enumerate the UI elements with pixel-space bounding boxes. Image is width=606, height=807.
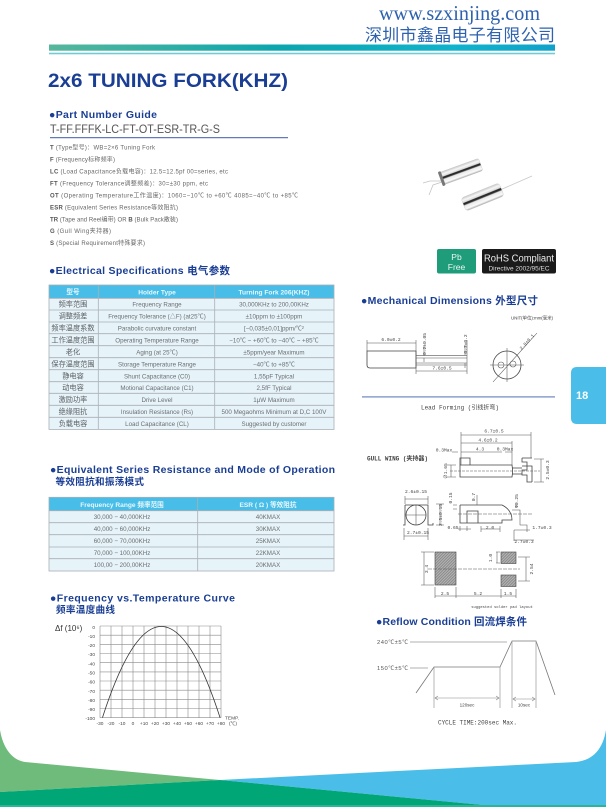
- table: electrical specifications: Operating Temperature Range: [115, 337, 199, 344]
- table: electrical specifications: 1,55pF Typical: [254, 373, 294, 380]
- table: ESR: 60,000 − 70,000KHz: [94, 538, 150, 545]
- table: ESR: 20KMAX: [256, 562, 280, 569]
- table: electrical specifications: Drive Level: [142, 397, 172, 404]
- y axis ticks: -60: [88, 680, 95, 686]
- unit note: UNIT(单位):mm(毫米): [511, 314, 554, 322]
- line chart: frequency vs temperature: [55, 624, 239, 727]
- panel: electrical specifications: [49, 264, 334, 429]
- drawing: gull wing top view: 2.5±0.3: [545, 460, 551, 480]
- drawing: gull wing front view: 2.7±0.15: [407, 530, 429, 536]
- chart grid: [100, 626, 221, 718]
- heading: frequency vs temperature: 频率温度曲线: [56, 604, 115, 616]
- table: electrical specifications: Frequency Tolerance (△F) (at25℃): [108, 312, 206, 320]
- table: electrical specifications: 保存温度范围: [51, 359, 95, 368]
- chart: reflow profile: 10sec: [518, 702, 531, 708]
- panel: reflow condition: [376, 615, 555, 726]
- caption: cycle time: CYCLE TIME:200sec Max.: [438, 720, 517, 726]
- table: electrical specifications: Motional Capacitance (C1): [120, 385, 194, 392]
- guide text lines: G (Gull Wing夹持器): [50, 227, 111, 235]
- title: 2x6 TUNING FORK(KHZ): [48, 71, 288, 92]
- table: electrical specifications: Parabolic curvature constant: [118, 325, 196, 332]
- drawing: gull wing side view: [447, 492, 552, 545]
- table: electrical specifications: −40℃ to +85℃: [253, 361, 295, 368]
- y axis ticks: -40: [88, 662, 95, 668]
- guide text lines: T (Type型号)：WB=2×6 Tuning Fork: [50, 144, 156, 152]
- badge: RoHS compliant: Directive 2002/95/EC: [488, 266, 550, 272]
- x axis ticks: +30: [162, 721, 170, 727]
- table: electrical specifications: 激励功率: [59, 395, 87, 404]
- chart: reflow profile: [377, 639, 555, 708]
- x axis ticks: -10: [119, 721, 126, 727]
- drawing: gull wing top view: 4.3: [476, 446, 484, 452]
- y axis ticks: [85, 625, 95, 722]
- drawing: gull wing front view: 2.5±0.15: [438, 504, 444, 526]
- drawing: end view: 2.0±0.1: [519, 333, 536, 352]
- page tab: 18: [571, 367, 606, 424]
- table: ESR: 40KMAX: [256, 514, 280, 521]
- table: ESR: 40,000 − 60,000KHz: [94, 526, 150, 533]
- table: electrical specifications: −10℃ ~ +60℃ to −40℃ ~ +85℃: [229, 337, 319, 344]
- y axis ticks: -20: [88, 643, 95, 649]
- x axis ticks: +50: [184, 721, 192, 727]
- drawing: side view: [367, 333, 469, 374]
- table: electrical specifications: 型号: [66, 287, 80, 296]
- table: electrical specifications: 绝缘阻抗: [59, 407, 87, 416]
- panel: equivalent series resistance: [49, 464, 335, 571]
- x axis ticks: +70: [206, 721, 214, 727]
- table: ESR: Frequency Range 频率范围: [80, 500, 164, 509]
- heading: reflow condition: ●Reflow Condition 回流焊条件: [376, 615, 528, 628]
- heading: electrical specifications: ●Electrical Specifications 电气参数: [49, 264, 230, 277]
- x axis ticks: +20: [151, 721, 159, 727]
- x axis ticks: +10: [140, 721, 148, 727]
- heading: equivalent series resistance: 等效阻抗和振荡模式: [56, 476, 144, 488]
- drawing: gull wing side view: 0.7: [471, 493, 477, 501]
- page tab: 18: 18: [576, 390, 588, 402]
- table: electrical specifications: ±10ppm to ±100ppm: [246, 314, 302, 320]
- guide underline: [50, 137, 288, 138]
- guide text lines: [50, 144, 298, 247]
- drawing: gull wing front view: 2.6±0.15: [405, 489, 427, 495]
- drawing: gull wing front view: [403, 489, 444, 540]
- table: electrical specifications: Storage Temperature Range: [118, 361, 197, 368]
- drawing: solder pad layout: 2.5: [441, 591, 449, 597]
- y axis ticks: 0: [92, 625, 95, 631]
- drawing: side view: 0.2±0.05: [422, 333, 428, 355]
- drawing: gull wing side view: 2.0: [486, 525, 494, 531]
- x axis ticks: +80: [217, 721, 225, 727]
- badge: Pb free: Pb: [451, 252, 462, 262]
- guide text lines: ESR (Equivalent Series Resistance等效阻抗): [50, 204, 178, 212]
- drawing: gull wing side view: Φ0.25: [514, 494, 520, 508]
- heading: equivalent series resistance: [50, 464, 335, 488]
- table: ESR: 30,000 − 40,000KHz: [94, 514, 150, 521]
- caption: lead forming: Lead Forming (引线折弯): [421, 404, 499, 412]
- table: electrical specifications: 1μW Maximum: [253, 397, 295, 404]
- drawing: gull wing top view: 0.3Max: [497, 446, 514, 452]
- y axis label: Δf (10⁶): [55, 624, 83, 633]
- badge: RoHS compliant: [482, 249, 556, 274]
- drawing: solder pad layout: 3.4: [424, 565, 430, 573]
- chart: reflow profile: 150℃±5℃: [377, 665, 408, 672]
- table: electrical specifications: 老化: [66, 347, 80, 356]
- heading: frequency vs temperature: [50, 592, 235, 616]
- bottom wave background: [0, 730, 606, 807]
- badge: Pb free: [437, 249, 476, 274]
- table: electrical specifications: 负载电容: [59, 419, 87, 428]
- table: electrical specifications: Shunt Capacitance (C0): [124, 373, 190, 380]
- drawing: solder pad layout: suggested solder pad layout: [471, 605, 533, 610]
- table: electrical specifications: Suggested by customer: [241, 421, 307, 428]
- table: electrical specifications: Load Capacitance (CL): [125, 421, 189, 428]
- table: electrical specifications: 500 Megaohms Minimum at D,C 100V: [222, 409, 327, 416]
- y axis ticks: -80: [88, 698, 95, 704]
- drawing: gull wing top view: 4.6±0.2: [478, 438, 498, 444]
- guide text lines: FT (Frequency Tolerance调整频差)：30=±30 ppm, etc: [50, 180, 208, 188]
- drawing: gull wing top view: 6.7±0.5: [484, 428, 504, 434]
- guide text lines: LC (Load Capacitance负载电容)：12.5=12.5pf 00=series, etc: [50, 168, 228, 176]
- panel: frequency vs temperature curve: [50, 592, 239, 727]
- y axis ticks: -90: [88, 707, 95, 713]
- table: ESR: ESR ( Ω ) 等效阻抗: [240, 500, 297, 509]
- table: electrical specifications: 2,5fF Typical: [257, 385, 291, 392]
- drawing: gull wing side view: 0.65: [447, 525, 459, 531]
- drawing: solder pad layout: [421, 552, 535, 610]
- y axis ticks: -10: [88, 634, 95, 640]
- drawing: gull wing side view: 1.7±0.3: [532, 525, 552, 531]
- temperature curve: [102, 626, 220, 718]
- heading: mechanical dimensions: ●Mechanical Dimensions 外型尺寸: [361, 294, 538, 307]
- divider: [362, 396, 555, 398]
- drawing: gull wing top view: ∅1.65: [443, 463, 449, 479]
- drawing: side view: 0.7±0.2: [463, 334, 469, 354]
- table: electrical specifications: 频率范围: [59, 300, 87, 308]
- y axis ticks: -30: [88, 652, 95, 658]
- crystal with straight leads: [461, 176, 532, 211]
- heading: frequency vs temperature: ●Frequency vs.Temperature Curve: [50, 592, 235, 604]
- table: electrical specifications: ±5ppm/year Maximum: [243, 349, 305, 356]
- guide text lines: OT (Operating Temperature工作温度)：1060=−10℃ to +60℃ 4085=−40℃ to +85℃: [50, 192, 298, 200]
- x axis ticks: -30: [97, 721, 104, 727]
- table: electrical specifications: Holder Type: [138, 290, 176, 296]
- badge: RoHS compliant: RoHS Compliant: [484, 254, 554, 264]
- table: ESR: 30KMAX: [256, 526, 280, 533]
- x axis ticks: 0: [132, 721, 135, 727]
- table: ESR: 25KMAX: [256, 538, 280, 545]
- table: electrical specifications: 工作温度范围: [51, 335, 95, 344]
- table: electrical specifications: Aging (at 25℃): [136, 349, 178, 356]
- drawing: solder pad layout: 1.0: [488, 554, 494, 562]
- table: ESR: 70,000 − 100,00KHz: [94, 550, 150, 557]
- chart: reflow profile: 120sec: [460, 702, 475, 708]
- drawing: solder pad layout: 5.2: [474, 591, 482, 597]
- drawing: solder pad layout: 2.54: [529, 563, 535, 575]
- table: electrical specifications: 静电容: [62, 371, 84, 380]
- company name: 深圳市鑫晶电子有限公司: [365, 26, 555, 45]
- header bar: [49, 44, 555, 54]
- table: electrical specifications: Insulation Resistance (Rs): [121, 409, 193, 416]
- table: electrical specifications: 动电容: [62, 383, 84, 392]
- x axis ticks: [97, 721, 225, 727]
- table: electrical specifications: [−0,035±0,01]ppm/℃²: [244, 325, 304, 332]
- chart: reflow profile: 240℃±5℃: [377, 639, 408, 646]
- table: electrical specifications: 频率温度系数: [51, 323, 95, 332]
- table: ESR: 22KMAX: [256, 550, 280, 557]
- drawing: gull wing top view: 0.3Max: [436, 448, 453, 454]
- panel: gull wing drawings: [367, 428, 552, 610]
- drawing: gull wing side view: 0.15: [448, 492, 454, 504]
- product photo: crystals: [423, 157, 532, 211]
- guide text lines: F (Frequency标称频率): [50, 156, 115, 164]
- y axis ticks: -100: [85, 716, 95, 722]
- guide text lines: S (Special Requirement特殊要求): [50, 239, 145, 247]
- table: electrical specifications: Frequency Range: [132, 302, 182, 308]
- guide text lines: TR (Tape and Reel编带) OR B (Bulk Pack散装): [50, 216, 178, 224]
- table: electrical specifications: [49, 285, 334, 429]
- table: electrical specifications: 30,000KHz to 200,00KHz: [239, 302, 309, 308]
- panel: part number guide: [49, 109, 298, 247]
- x axis ticks: +60: [195, 721, 203, 727]
- x axis label: [225, 716, 239, 727]
- drawing: solder pad layout: 1.5: [504, 591, 512, 597]
- x axis label: (℃): [229, 721, 237, 727]
- x axis label: TEMP.: [225, 716, 239, 722]
- y axis ticks: -70: [88, 689, 95, 695]
- badge: Pb free: Free: [448, 262, 466, 272]
- part number pattern: T-FF.FFFK-LC-FT-OT-ESR-TR-G-S: [50, 124, 220, 136]
- drawing: side view: 7.6±0.5: [432, 366, 452, 372]
- drawing: gull wing top view: [436, 428, 551, 482]
- x axis ticks: +40: [173, 721, 181, 727]
- table: electrical specifications: Turning Fork 206(KHZ): [239, 290, 309, 296]
- company website: www.szxinjing.com: [379, 1, 540, 25]
- drawing: side view: 6.0±0.2: [381, 337, 401, 343]
- heading: equivalent series resistance: ●Equivalent Series Resistance and Mode of Operation: [50, 464, 335, 476]
- table: electrical specifications: 调整频差: [59, 312, 87, 320]
- y axis ticks: -50: [88, 670, 95, 676]
- panel: mechanical dimensions: [361, 294, 555, 412]
- crystal with forked leads: [423, 157, 483, 195]
- table: ESR: 100,00 − 200,00KHz: [94, 562, 150, 569]
- table: ESR: [49, 497, 334, 571]
- drawing: end view: [490, 333, 537, 382]
- label: gull wing: GULL WING (夹持器): [367, 454, 428, 462]
- x axis ticks: -20: [108, 721, 115, 727]
- heading: part number guide: ●Part Number Guide: [49, 109, 157, 121]
- drawing: gull wing side view: 2.7±0.3: [514, 539, 534, 545]
